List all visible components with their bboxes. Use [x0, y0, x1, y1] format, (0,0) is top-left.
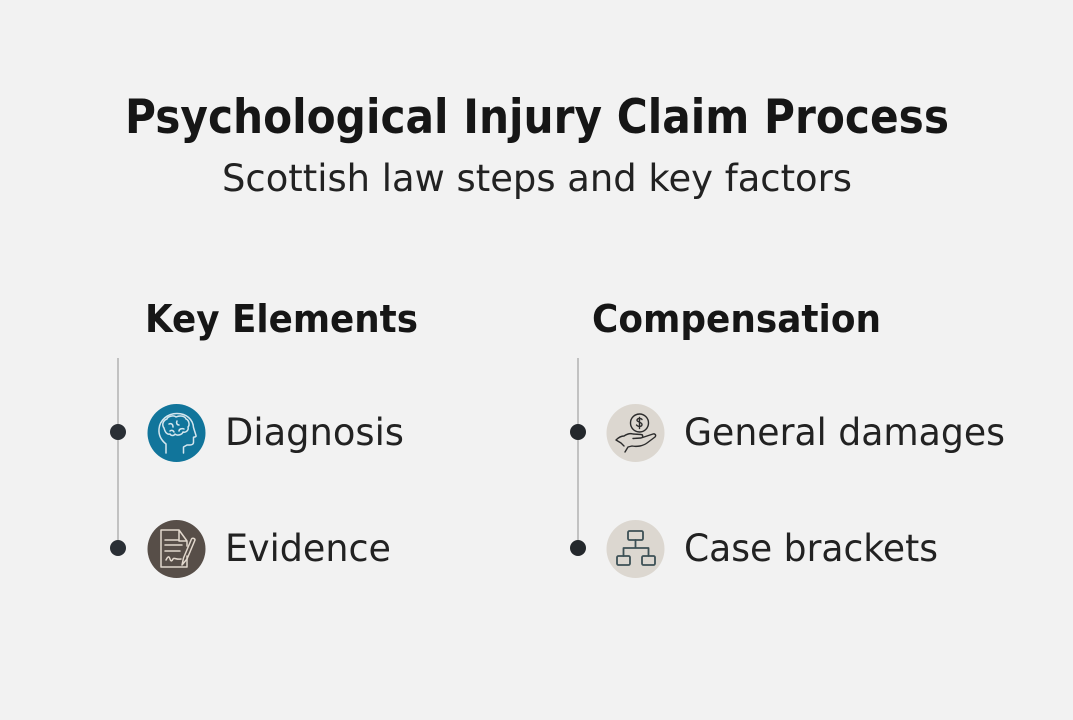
icon: signed document [148, 520, 206, 578]
icon: hand holding coin [606, 404, 664, 462]
label: general damages: General damages [684, 411, 1005, 454]
timeline line: key elements [117, 358, 119, 548]
label: diagnosis: Diagnosis [225, 411, 404, 454]
heading: compensation: Compensation [592, 297, 881, 341]
title: Psychological Injury Claim Process [125, 90, 949, 145]
timeline dot: general damages [570, 424, 586, 440]
icon: head with brain [148, 404, 206, 462]
timeline dot: diagnosis [110, 424, 126, 440]
timeline dot: case brackets [570, 540, 586, 556]
timeline line: compensation [577, 358, 579, 548]
label: case brackets: Case brackets [684, 527, 938, 570]
label: evidence: Evidence [225, 527, 391, 570]
subtitle: Scottish law steps and key factors [222, 157, 852, 200]
icon: hierarchy chart [606, 520, 664, 578]
heading: key elements: Key Elements [145, 297, 418, 341]
panel: key elements [110, 297, 418, 578]
timeline dot: evidence [110, 540, 126, 556]
panel: compensation [570, 297, 1005, 578]
